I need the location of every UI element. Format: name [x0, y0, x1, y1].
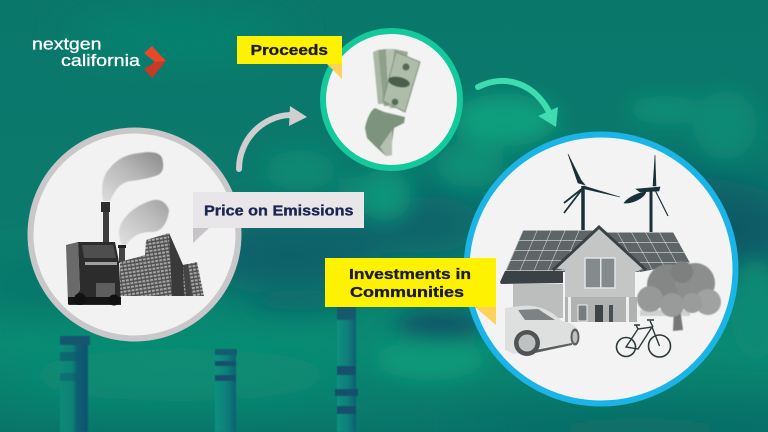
illustration: wind turbines — [564, 154, 668, 232]
illustration: truck — [66, 242, 121, 306]
illustration: factory chimneys — [101, 202, 126, 263]
illustration: house — [500, 227, 690, 322]
callout: investments in communities — [325, 258, 496, 325]
callout: investments in communities: Investments in — [349, 266, 471, 283]
illustration: hand holding cash — [365, 49, 420, 156]
callout: investments in communities: Communities — [350, 284, 464, 301]
panel: proceeds circle — [323, 31, 460, 168]
logo: nextgen california — [32, 34, 166, 78]
callout: proceeds — [237, 36, 342, 79]
logo: nextgen california: nextgen — [32, 34, 102, 54]
illustration: tree — [637, 261, 721, 331]
smokestack: left — [60, 336, 90, 432]
logo: nextgen california: california — [61, 51, 141, 70]
panel: investments circle — [466, 134, 736, 404]
illustration: bicycle — [616, 320, 670, 357]
callout: price on emissions: Price on Emissions — [204, 202, 354, 220]
illustration: car — [505, 306, 580, 356]
smokestack: middle — [215, 349, 237, 432]
callout: price on emissions — [193, 192, 364, 243]
arrow: emissions to proceeds — [239, 106, 307, 169]
smokestack: right — [335, 300, 358, 432]
illustration: smoke plumes — [102, 152, 169, 245]
callout: proceeds: Proceeds — [250, 42, 328, 59]
panel: price on emissions circle — [30, 130, 238, 338]
arrow: proceeds to investments — [478, 81, 558, 127]
illustration: factory building — [120, 233, 204, 296]
